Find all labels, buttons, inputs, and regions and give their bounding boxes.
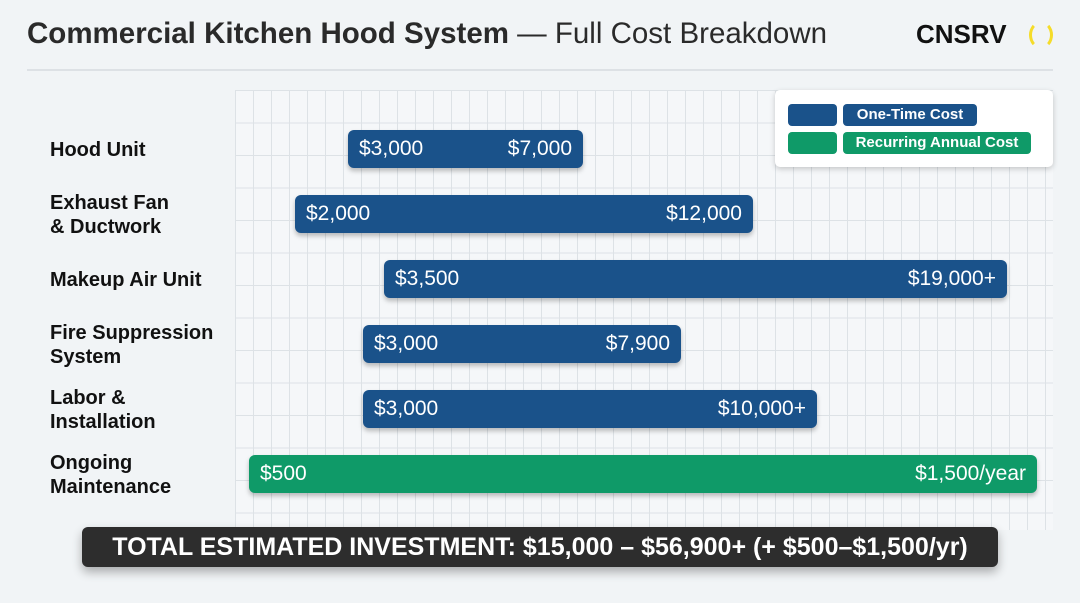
total banner: TOTAL ESTIMATED INVESTMENT: $15,000 – $56,900+ (+ $500–$1,500/yr) — [112, 533, 968, 561]
label: fire suppression: System — [50, 346, 121, 368]
title: Commercial Kitchen Hood System — Full Cost Breakdown — [27, 17, 827, 50]
bar: makeup air: $19,000+ — [908, 267, 996, 290]
bar: fire suppression: $3,000 — [374, 332, 438, 355]
legend — [775, 90, 1053, 167]
label: labor: Labor & — [50, 387, 126, 409]
bar: hood unit: $7,000 — [508, 137, 572, 160]
bar: exhaust — [295, 195, 753, 233]
label: exhaust — [50, 192, 169, 238]
label: fire suppression: Fire Suppression — [50, 322, 213, 344]
bar: hood unit: $3,000 — [359, 137, 423, 160]
chart grid — [235, 90, 1053, 530]
bar: labor — [363, 390, 817, 428]
label: exhaust: Exhaust Fan — [50, 192, 169, 214]
label: makeup air: Makeup Air Unit — [50, 269, 202, 291]
label: exhaust: & Ductwork — [50, 216, 161, 238]
bar: exhaust: $12,000 — [666, 202, 742, 225]
bar: hood unit — [348, 130, 583, 168]
bar: maintenance: $1,500/year — [915, 462, 1026, 485]
bar: maintenance: $500 — [260, 462, 307, 485]
label: fire suppression — [50, 322, 213, 368]
bar: fire suppression — [363, 325, 681, 363]
bar: labor: $3,000 — [374, 397, 438, 420]
label: maintenance: Maintenance — [50, 476, 171, 498]
label: labor: Installation — [50, 411, 156, 433]
legend: Recurring Annual Cost — [856, 134, 1018, 151]
bar: exhaust: $2,000 — [306, 202, 370, 225]
label: maintenance: Ongoing — [50, 452, 132, 474]
total banner — [82, 527, 998, 567]
label: labor — [50, 387, 156, 433]
bar: fire suppression: $7,900 — [606, 332, 670, 355]
bar: makeup air — [384, 260, 1007, 298]
logo: CNSRV — [916, 19, 1007, 49]
icon: logo ring — [1029, 21, 1053, 49]
label: maintenance — [50, 452, 171, 498]
bar: maintenance — [249, 455, 1037, 493]
bar: labor: $10,000+ — [718, 397, 806, 420]
bar: makeup air: $3,500 — [395, 267, 459, 290]
legend: One-Time Cost — [857, 106, 963, 123]
label: hood unit: Hood Unit — [50, 139, 146, 161]
